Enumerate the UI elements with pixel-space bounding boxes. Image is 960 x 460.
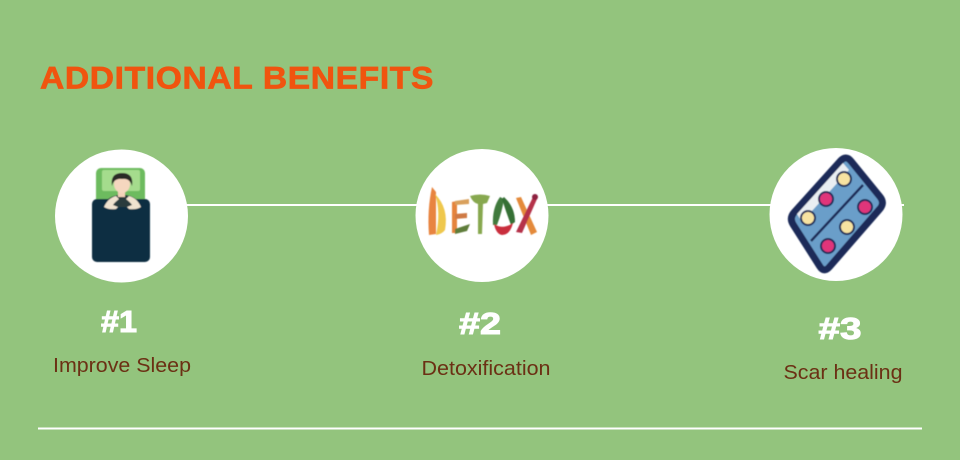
benefit 2: detoxification [416, 149, 550, 380]
icon: sleeping person in circle [55, 150, 188, 282]
connector line [186, 204, 904, 206]
label: Detoxification [422, 358, 550, 380]
benefit 1: improve sleep [53, 150, 191, 377]
icon: blister pack in circle [770, 148, 902, 281]
title: ADDITIONAL BENEFITS [40, 60, 434, 96]
label: Improve Sleep [53, 355, 191, 377]
number 2: #2 [459, 306, 501, 341]
benefit 3: scar healing [770, 148, 902, 384]
icon: detox lettering in circle [416, 149, 548, 282]
divider [38, 428, 922, 430]
number 1: #1 [101, 304, 137, 339]
number 3: #3 [818, 311, 862, 346]
label: Scar healing [784, 362, 902, 384]
